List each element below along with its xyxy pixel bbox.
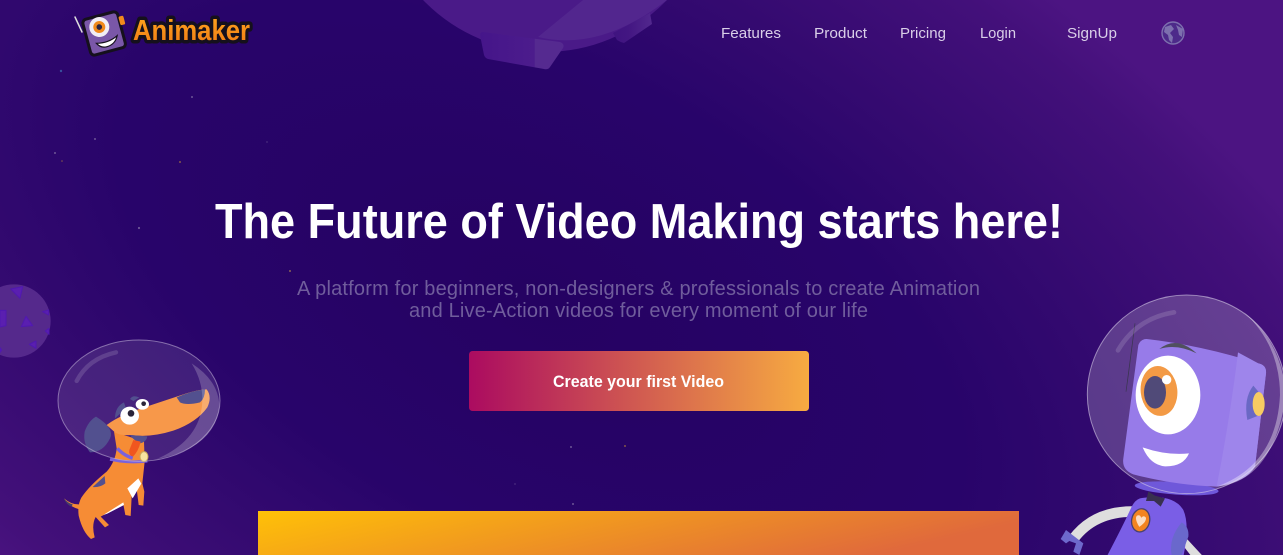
robot arm right [1180, 535, 1203, 555]
subtitle [297, 278, 980, 322]
robot head [1123, 339, 1266, 487]
robot bow tie [1146, 492, 1165, 507]
title: The Future of Video Making starts here! [215, 195, 1063, 249]
logo wordmark: Animaker [133, 15, 250, 47]
top planet [376, 0, 714, 69]
small moon [0, 284, 51, 358]
robot helmet reflections [1087, 295, 1283, 494]
dog head [107, 389, 210, 436]
dog mouth and tongue [130, 435, 147, 443]
robot torso [1107, 497, 1187, 555]
character: dog astronaut [58, 340, 220, 539]
subtitle line 1: A platform for beginners, non-designers & professionals to create Animation [297, 278, 980, 300]
robot ear [1246, 386, 1265, 420]
robot eyebrow [1159, 343, 1197, 353]
button label: Create your first Video [553, 372, 724, 391]
nav item: Product: Product [814, 25, 868, 42]
robot shoulder [1171, 522, 1188, 555]
dog tail [64, 498, 82, 510]
icon: globe [1162, 22, 1184, 44]
logo [75, 10, 250, 56]
nav item: SignUp: SignUp [1067, 25, 1117, 42]
robot mouth [1143, 447, 1189, 466]
call-to-action button [469, 351, 809, 411]
robot head highlight [1217, 352, 1266, 486]
logo antenna [75, 17, 82, 32]
dog helmet glass [58, 340, 220, 461]
robot antenna [1126, 323, 1135, 392]
dog body [78, 432, 145, 539]
robot arm left [1073, 512, 1137, 539]
character: robot astronaut [1061, 295, 1283, 555]
logo robot icon [82, 10, 131, 56]
nav item: Pricing: Pricing [900, 25, 946, 42]
navigation [721, 25, 1117, 42]
dog snout patch [177, 389, 205, 404]
robot neck collar [1134, 479, 1219, 498]
dog ear [84, 417, 111, 452]
planet crater large [480, 32, 564, 69]
nav item: Features: Features [721, 25, 781, 42]
robot eye [1136, 356, 1200, 434]
robot hand [1061, 530, 1083, 555]
dog upper head ear [115, 396, 139, 418]
dog belly patch [103, 478, 141, 515]
dog tag [140, 452, 148, 462]
robot helmet glass [1087, 295, 1283, 494]
yellow video panel [258, 511, 1019, 555]
starfield [54, 70, 626, 505]
dog back patch [93, 476, 105, 487]
planet crater small [613, 13, 652, 43]
robot chest badge [1129, 507, 1152, 534]
dog helmet reflections [58, 340, 220, 461]
dog collar [110, 448, 147, 462]
subtitle line 2: and Live-Action videos for every moment of our life [409, 300, 868, 322]
nav item: Login: Login [980, 25, 1016, 42]
dog eyes [120, 399, 149, 425]
